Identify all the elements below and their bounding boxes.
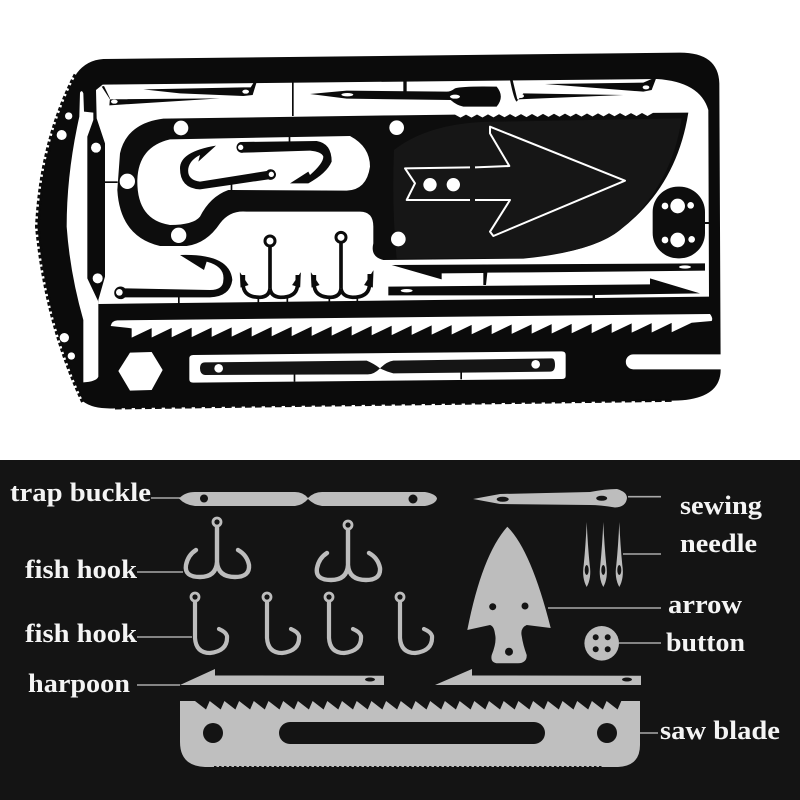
part: sewing needle long [473,489,627,508]
double hook 2 [311,232,373,304]
card holes [57,112,406,360]
top needles [102,78,656,116]
knife with handle loop [117,113,688,260]
label: sewing: sewing [680,491,762,520]
edge slot [626,354,727,369]
part: arrow head [467,527,551,663]
panel: multi-tool card photo [37,53,727,408]
blade surface [393,118,682,259]
saw teeth slot [111,314,712,338]
leader lines [137,497,661,733]
white cut-out area [96,79,709,304]
fish hook A [180,146,276,189]
arrow head outline [405,127,625,236]
label: harpoon: harpoon [28,669,131,698]
arrow head rivet holes [423,178,460,191]
thin bridge to bar [105,181,118,183]
hexagon wrench [118,352,163,391]
left white strip [67,91,98,382]
part: single fish hooks [191,593,432,653]
label: fish hook lower: fish hook [25,619,138,648]
button blank [653,187,710,258]
fish hook B [237,141,332,183]
part: double fish hooks [186,518,380,580]
part: button [584,626,619,661]
double hook 1 [240,236,301,304]
hook eyes and bridges [231,135,290,191]
trap buckle slot [189,351,566,383]
label: needle: needle [680,529,757,558]
harpoon pointing left [392,263,705,285]
part: saw blade [180,701,640,767]
panel: labelled parts [0,460,800,800]
label: trap buckle: trap buckle [10,478,151,507]
part: harpoons [180,669,641,685]
label: saw blade: saw blade [660,716,780,745]
harpoon pointing right [388,278,700,298]
label: arrow: arrow [668,590,742,619]
needle eyes [111,85,649,104]
part: trap buckle [179,492,437,506]
label: fish hook top: fish hook [25,555,138,584]
large bottom hook [114,255,232,304]
label: button: button [666,628,746,657]
part: three needles [583,522,623,587]
